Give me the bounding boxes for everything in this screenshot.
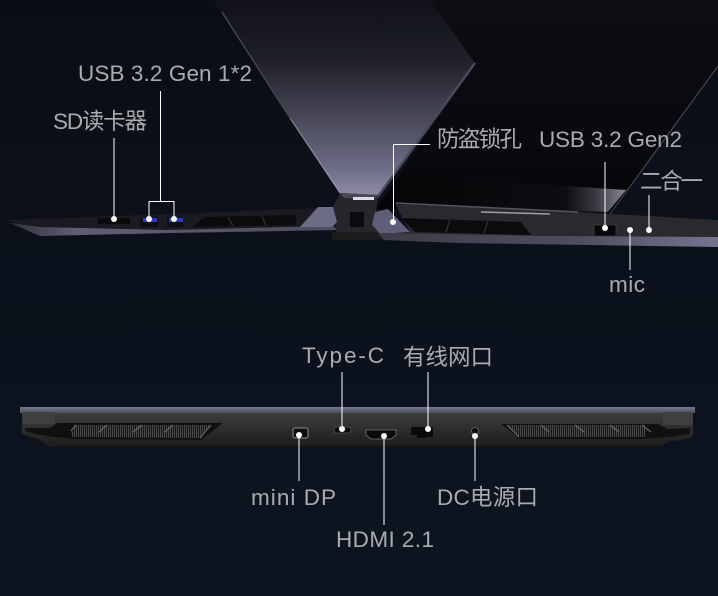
laptop screen panel — [376, 0, 718, 214]
rear laptop view — [20, 407, 695, 447]
rear top strip — [20, 407, 695, 413]
left hinge plate — [300, 207, 337, 227]
port: HDMI — [366, 430, 396, 439]
leader: USB 3.2 Gen 1 bracket — [146, 91, 177, 222]
label: mini DP: mini DP — [251, 485, 336, 510]
port: Type-C — [334, 427, 351, 433]
right vent frame — [501, 424, 690, 439]
leader: USB 3.2 Gen2 — [602, 162, 608, 231]
label: combo jack: 二合一 — [640, 169, 703, 194]
leader: RJ45 — [425, 372, 431, 432]
hinge shadow — [332, 232, 402, 240]
leader: HDMI — [381, 433, 387, 525]
label: mic: mic — [609, 272, 645, 297]
left base vent — [192, 215, 296, 227]
left vent grille — [71, 425, 211, 438]
wedge left edge — [222, 12, 290, 118]
right corner block — [663, 412, 693, 425]
wedge right edge — [376, 63, 475, 199]
port: USB right — [594, 225, 616, 236]
port: USB left 1 — [140, 217, 158, 227]
hinge — [333, 193, 380, 240]
label: Type-C: Type-C — [302, 343, 384, 368]
rear body — [22, 413, 693, 447]
open laptop side view — [8, 0, 718, 247]
lower trim — [55, 445, 660, 447]
port: DC jack — [472, 428, 478, 434]
right hinge plate — [372, 209, 410, 234]
right base vent — [401, 218, 531, 235]
screen lower glow — [385, 175, 626, 212]
label: security lock: 防盗锁孔 — [437, 127, 522, 152]
port: SD slot — [98, 218, 130, 224]
wedge edge highlights — [290, 118, 340, 193]
label: USB 3.2 Gen 1*2: USB 3.2 Gen 1*2 — [78, 61, 252, 86]
leader: mini DP — [296, 432, 302, 481]
left corner block — [23, 412, 55, 424]
label: SD card reader: SD读卡器 — [53, 109, 147, 134]
left base — [8, 206, 340, 236]
light wedge between lid and base — [213, 0, 475, 195]
leader: mic — [627, 227, 633, 270]
label: HDMI 2.1: HDMI 2.1 — [336, 527, 434, 552]
right base — [380, 204, 718, 240]
leader: combo jack — [646, 195, 652, 233]
label: USB 3.2 Gen2: USB 3.2 Gen2 — [539, 127, 682, 152]
leader: DC — [472, 433, 478, 481]
label: DC power: DC电源口 — [437, 485, 538, 510]
label: Ethernet port: 有线网口 — [403, 345, 493, 370]
left vent frame — [25, 423, 223, 440]
leader: lock — [390, 144, 430, 225]
left base front edge — [10, 223, 338, 236]
right base front edge — [378, 233, 718, 247]
port: USB left 2 — [167, 217, 183, 227]
leader: SD — [111, 138, 117, 222]
right base top highlight — [396, 203, 578, 214]
screen edge highlight — [610, 66, 718, 214]
leader: Type-C — [339, 372, 345, 432]
port: mini DP — [293, 428, 308, 438]
right vent grille — [507, 425, 651, 437]
port: RJ45 — [411, 427, 433, 438]
